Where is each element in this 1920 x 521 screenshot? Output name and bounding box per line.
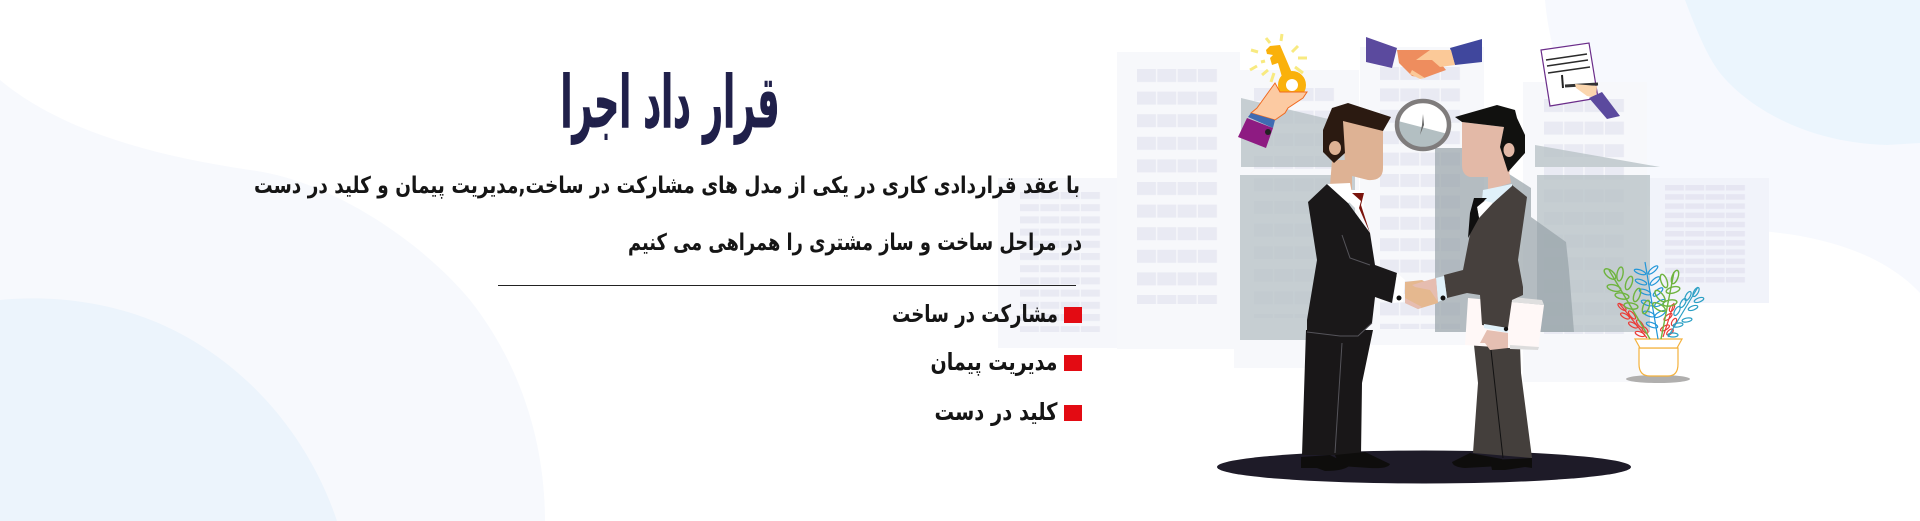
signature — [1562, 75, 1563, 88]
face — [1462, 122, 1510, 177]
left sleeve — [1366, 37, 1397, 68]
sleeve — [1589, 92, 1620, 119]
neck — [1488, 165, 1511, 190]
hand — [1251, 83, 1307, 120]
text: قرار داد اجرا — [560, 60, 780, 145]
ear — [1504, 143, 1514, 157]
ground shadow ellipse — [1217, 450, 1631, 484]
building centre — [1360, 47, 1484, 345]
dark shadow building — [1435, 148, 1574, 332]
icon: handshake — [1366, 37, 1482, 79]
building far right — [1650, 178, 1769, 303]
wall clock — [1397, 101, 1449, 149]
list item: turnkey: کلید در دست — [934, 398, 1058, 426]
shirt — [1350, 190, 1364, 218]
folder — [1465, 297, 1544, 350]
forearm cuff — [1484, 324, 1508, 333]
text lines — [1546, 54, 1590, 73]
blue branch — [1634, 262, 1666, 339]
jacket — [1307, 184, 1397, 336]
shoes — [1301, 452, 1390, 471]
potted plant — [1602, 262, 1704, 383]
key shaft — [1266, 45, 1292, 77]
tie — [1352, 193, 1370, 233]
shirt — [1477, 199, 1493, 218]
pot shadow — [1626, 375, 1690, 383]
building far left — [998, 178, 1120, 348]
ear — [1329, 141, 1341, 155]
clasped hands — [1405, 278, 1438, 309]
building left — [1117, 52, 1240, 349]
list item: contract management: مدیریت پیمان — [930, 348, 1058, 376]
lower hand — [1480, 330, 1508, 350]
blue cuff — [1248, 113, 1275, 128]
icon: hand holding key — [1238, 34, 1307, 148]
hand — [1575, 84, 1597, 98]
cuff at handshake — [1436, 276, 1447, 302]
body text line 1: با عقد قراردادی کاری در یکی از مدل های مشارکت در ساخت,مدیریت پیمان و کلید در دست — [254, 173, 1080, 199]
teal branch — [1668, 287, 1704, 337]
light hand — [1416, 50, 1455, 67]
divider — [498, 285, 1076, 286]
background curve: left inner — [0, 298, 337, 521]
grey block left — [1240, 175, 1355, 340]
green branches — [1602, 267, 1681, 339]
right sleeve — [1450, 39, 1482, 65]
background curve: right inner — [1685, 0, 1920, 145]
grey roof right — [1535, 145, 1660, 167]
key rays — [1250, 34, 1307, 82]
face — [1343, 120, 1383, 180]
jacket seam — [1307, 235, 1372, 453]
orange hand — [1397, 50, 1446, 78]
body text line 2: در مراحل ساخت و ساز مشتری را همراهی می کنیم — [628, 230, 1082, 256]
cuff — [1393, 273, 1405, 303]
shoes — [1452, 453, 1532, 470]
grey block right — [1537, 175, 1650, 332]
background curve: left outer — [0, 80, 545, 521]
building second — [1234, 70, 1359, 368]
purple sleeve — [1238, 118, 1273, 148]
tie — [1468, 198, 1487, 238]
icon: signing contract — [1541, 43, 1620, 119]
neck — [1330, 160, 1352, 190]
red branches — [1617, 302, 1678, 338]
background curve: right outer — [1545, 0, 1920, 293]
hair — [1455, 105, 1525, 172]
collar — [1327, 183, 1352, 203]
jacket and sleeves — [1444, 185, 1527, 328]
sleeve button — [1265, 129, 1271, 135]
trouser crease — [1491, 350, 1503, 458]
building right — [1523, 82, 1647, 382]
city skyline — [998, 47, 1769, 382]
trousers — [1473, 345, 1532, 458]
left businessman — [1301, 103, 1405, 471]
key ring — [1282, 75, 1302, 95]
right businessman — [1436, 105, 1544, 470]
paper — [1541, 43, 1598, 106]
pot — [1635, 339, 1682, 376]
hair — [1323, 103, 1391, 163]
collar — [1482, 184, 1512, 203]
grey roof left — [1241, 98, 1345, 167]
pen — [1565, 84, 1598, 86]
trousers — [1302, 330, 1373, 455]
list item: partnership: مشارکت در ساخت — [892, 300, 1058, 328]
